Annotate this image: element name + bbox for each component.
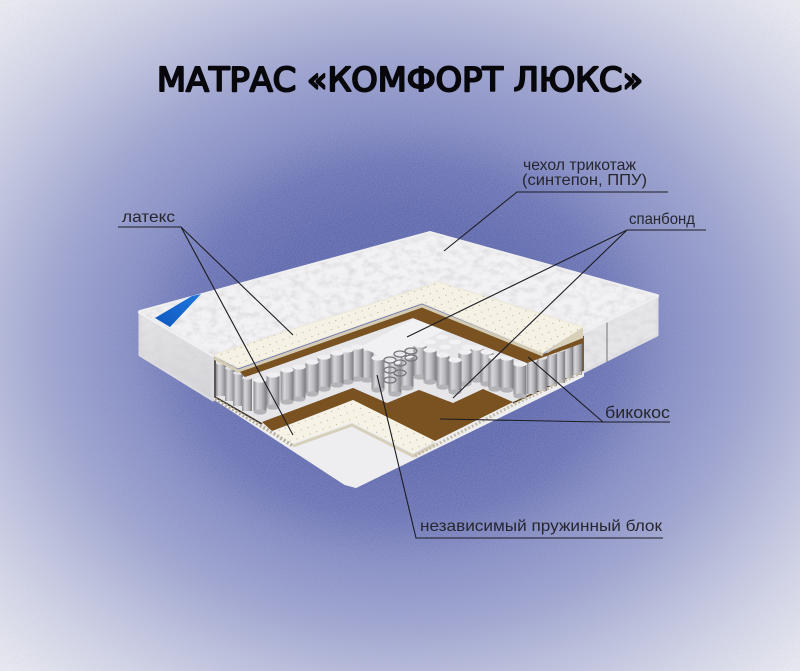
pocket springs bbox=[216, 335, 582, 415]
label: независимый пружинный блок: независимый пружинный блок bbox=[420, 518, 663, 535]
label: чехол трикотаж: чехол трикотаж bbox=[523, 157, 636, 174]
right side panel bbox=[583, 297, 657, 372]
label: латекс bbox=[118, 209, 293, 435]
left side panel bbox=[140, 313, 213, 400]
spunbond sheet bbox=[360, 319, 445, 358]
cavity dark frame bbox=[215, 358, 262, 424]
upper coir layer bbox=[238, 306, 583, 377]
cavity right frame bbox=[513, 337, 583, 403]
label: независимый пружинный блок bbox=[377, 375, 663, 538]
bare coil springs bbox=[384, 348, 417, 383]
white base board bbox=[213, 368, 583, 487]
lower coir layer bbox=[262, 388, 513, 441]
label: бикокос: бикокос bbox=[605, 404, 670, 422]
upper latex layer bbox=[213, 282, 583, 371]
label: спанбонд bbox=[407, 211, 706, 398]
quilted top cover bbox=[140, 233, 657, 355]
brand tag bbox=[155, 294, 201, 327]
spring cavity bbox=[215, 318, 583, 422]
label: спанбонд: спанбонд bbox=[629, 211, 696, 228]
lower latex layer bbox=[215, 372, 583, 456]
label: бикокос bbox=[440, 357, 670, 422]
label: чехол трикотаж bbox=[444, 157, 668, 251]
title: МАТРАС «КОМФОРТ ЛЮКС» bbox=[157, 60, 643, 99]
label: чехол трикотаж: (синтепон, ППУ) bbox=[522, 172, 647, 189]
mattress illustration bbox=[140, 233, 657, 487]
label: латекс: латекс bbox=[122, 209, 175, 226]
